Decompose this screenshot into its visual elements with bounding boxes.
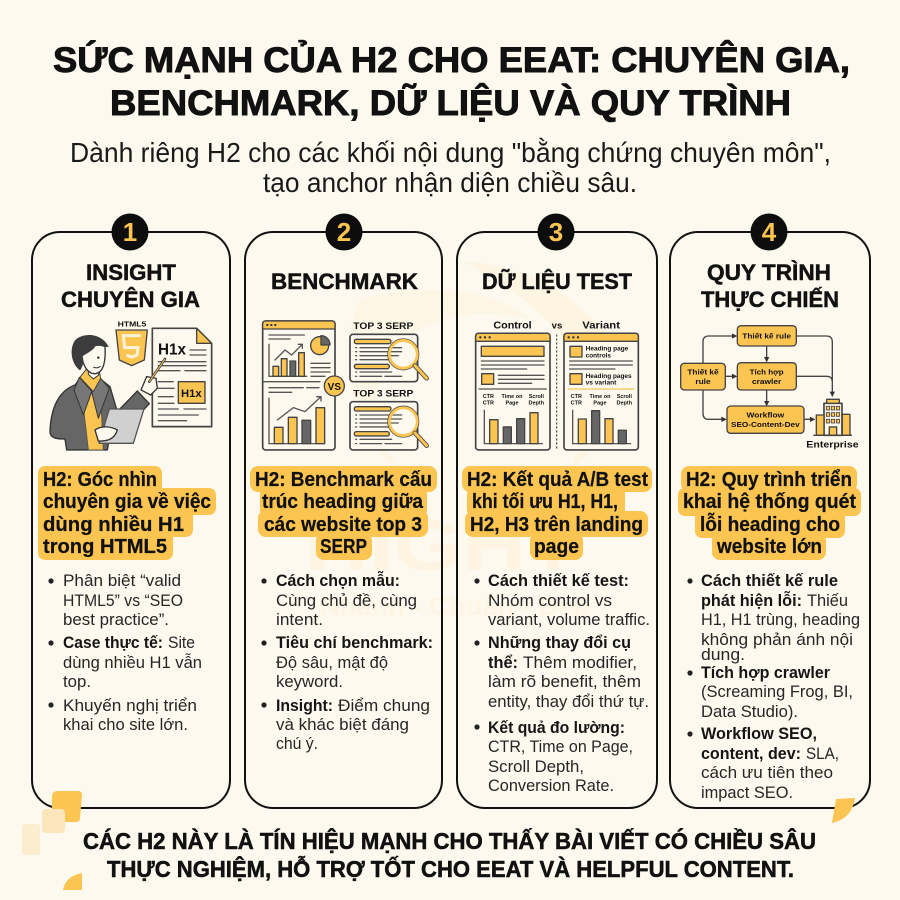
icon: control vs variant A/B test: Page (593, 401, 607, 407)
heading: dữ liệu test: DỮ LIỆU TEST (482, 269, 632, 294)
bullet list (687, 571, 860, 802)
H2 highlight text: H2: Quy trình triển (686, 469, 852, 491)
diagram: workflow to enterprise: Thiết kế rule (742, 332, 791, 341)
heading: quy trình thực chiến (701, 260, 839, 312)
H2 highlight text: dùng nhiều H1 (43, 514, 184, 536)
heading: benchmark: BENCHMARK (271, 269, 419, 294)
bullet list: khai cho site lớn. (63, 715, 188, 734)
bullet list: Kết quả đo lường: (488, 718, 625, 737)
diagram: workflow to enterprise: SEO-Content-Dev (731, 420, 800, 429)
title: SỨC MẠNH CỦA H2 CHO EEAT: CHUYÊN GIA, (53, 40, 850, 80)
H2 highlight text: page (534, 536, 579, 558)
icon: control vs variant A/B test: Heading page (586, 347, 629, 353)
H2 highlight text: trúc heading giữa (262, 491, 424, 513)
badge 4 (750, 214, 788, 250)
bullet list: Cách thiết kế rule (701, 571, 838, 590)
badge 4: 4 (762, 217, 777, 247)
bullet list: (Screaming Frog, BI, (701, 682, 853, 701)
subtitle (70, 137, 831, 198)
H2 highlight text (38, 466, 216, 560)
badge 3 (538, 214, 574, 250)
panel: insight chuyên gia (32, 214, 230, 808)
diagram: workflow to enterprise: Thiết kế (687, 367, 719, 376)
bullet list: làm rõ benefit, thêm (488, 672, 641, 691)
watermark logo: HIGHT (305, 506, 580, 586)
diagram: workflow to enterprise: rule (695, 377, 711, 386)
bullet list: entity, thay đổi thứ tự. (488, 692, 649, 711)
footer conclusion: THỰC NGHIỆM, HỖ TRỢ TỐT CHO EEAT VÀ HELPFUL CONTENT. (107, 854, 794, 882)
icon: expert pointing at document (50, 321, 212, 450)
H2 highlight text: chuyên gia về việc (43, 491, 211, 513)
H2 highlight text: H2: Benchmark cấu (255, 469, 432, 491)
bullet list: phát hiện lỗi: (701, 591, 802, 610)
diagram: workflow to enterprise: Workflow (746, 410, 784, 419)
icon: control vs variant A/B test: Heading pages (586, 374, 632, 380)
H2 highlight text: website lớn (716, 536, 822, 558)
bullet list: intent. (276, 610, 323, 629)
bullet list: H1, H1 trùng, heading (701, 610, 860, 629)
bullet list: Site (168, 633, 195, 652)
bullet list: HTML5” vs “SEO (63, 591, 183, 610)
badge 3: 3 (549, 217, 563, 247)
bullet list: chú ý. (276, 734, 318, 753)
H2 highlight text: trong HTML5 (43, 536, 167, 558)
bullet list: Insight: (276, 696, 333, 715)
bullet list: Khuyến nghị triển (63, 696, 197, 715)
H2 highlight text: các website top 3 (264, 514, 422, 536)
bullet list: Data Studio). (701, 702, 798, 721)
icon: control vs variant A/B test: Depth (529, 401, 545, 407)
bullet list: không phản ánh nội (701, 630, 853, 649)
H2 highlight text: khai hệ thống quét (683, 491, 856, 513)
icon: expert pointing at document: H1x (181, 388, 202, 400)
H2 highlight text (250, 466, 437, 560)
bullet list: SLA, (806, 744, 839, 763)
subtitle: Dành riêng H2 cho các khối nội dung "bằng chứng chuyên môn", (70, 137, 831, 168)
icon: benchmark dashboard vs top 3 serp (263, 321, 427, 450)
bullet list: Cùng chủ đề, cùng (276, 591, 417, 610)
icon: control vs variant A/B test: CTR (483, 394, 494, 400)
icon: control vs variant A/B test: Scroll (529, 394, 544, 400)
icon: control vs variant A/B test: controls (586, 353, 612, 359)
bullet list: Tích hợp crawler (701, 663, 830, 682)
heading: quy trình thực chiến: QUY TRÌNH (707, 260, 831, 285)
bullet list: Phân biệt “valid (63, 571, 181, 590)
H2 highlight text: H2: Kết quả A/B test (467, 469, 648, 491)
H2 highlight text: lỗi heading cho (700, 512, 840, 536)
H2 highlight text: khi tối ưu H1, H1, (472, 491, 618, 513)
bullet list: top. (63, 672, 91, 691)
icon: control vs variant A/B test: Variant (582, 320, 621, 331)
bullet list: Thiếu (807, 591, 848, 610)
bullet list (48, 571, 202, 734)
heading: insight chuyên gia: CHUYÊN GIA (61, 287, 200, 312)
panel: benchmark (245, 214, 442, 808)
badge 1 (112, 214, 148, 250)
bullet list (474, 571, 650, 795)
panel: quy trình thực chiến (670, 214, 870, 808)
diagram: workflow to enterprise: Tích hợp (750, 367, 784, 376)
bullet list: Scroll Depth, (488, 757, 584, 776)
icon: control vs variant A/B test: Time on (502, 394, 523, 400)
bullet list: Nhóm control vs (488, 591, 612, 610)
decorative accents (22, 791, 855, 890)
bullet list: Cách thiết kế test: (488, 571, 629, 590)
icon: control vs variant A/B test: Scroll (617, 394, 632, 400)
icon: control vs variant A/B test: CTR (571, 394, 582, 400)
icon: benchmark dashboard vs top 3 serp: TOP 3 SERP (353, 321, 413, 331)
watermark logo: Nhanh - Chuẩn - Đẹp (320, 593, 590, 621)
bullet list: Workflow SEO, (701, 724, 817, 743)
icon: control vs variant A/B test: vs (552, 320, 562, 330)
bullet list: Những thay đổi cụ (488, 633, 631, 652)
icon: control vs variant A/B test: vs variant (586, 380, 616, 386)
heading: insight chuyên gia (61, 260, 200, 312)
bullet list: dung. (701, 645, 745, 664)
icon: expert pointing at document: H1x (158, 341, 186, 358)
heading: quy trình thực chiến: THỰC CHIẾN (701, 287, 839, 312)
subtitle: tạo anchor nhận diện chiều sâu. (263, 167, 637, 198)
bullet list: thể: (488, 653, 518, 672)
bullet list (261, 571, 433, 753)
icon: control vs variant A/B test: Depth (617, 401, 633, 407)
badge 1: 1 (123, 217, 137, 247)
H2 highlight text: H2, H3 trên landing (470, 514, 643, 536)
H2 highlight text (462, 466, 652, 560)
bullet list: Case thực tế: (63, 633, 163, 652)
bullet list: impact SEO. (701, 783, 793, 802)
bullet list: Điểm chung (338, 696, 430, 715)
H2 highlight text: SERP (320, 536, 367, 558)
title (53, 40, 850, 123)
bullet list: keyword. (276, 672, 343, 691)
badge 2: 2 (337, 217, 351, 247)
badge 2 (326, 214, 362, 250)
bullet list: Thêm modifier, (523, 653, 637, 672)
bullet list: Conversion Rate. (488, 776, 614, 795)
bullet list: Độ sâu, mật độ (276, 653, 388, 672)
icon: benchmark dashboard vs top 3 serp: TOP 3 SERP (353, 389, 413, 399)
bullet list: content, dev: (701, 744, 801, 763)
bullet list: dùng nhiều H1 vẫn (63, 653, 202, 672)
watermark logo (305, 262, 619, 621)
footer conclusion: CÁC H2 NÀY LÀ TÍN HIỆU MẠNH CHO THẤY BÀI VIẾT CÓ CHIỀU SÂU (83, 827, 816, 854)
diagram: workflow to enterprise: Enterprise (806, 439, 859, 449)
diagram: workflow to enterprise: crawler (752, 377, 781, 386)
panel: dữ liệu test (457, 214, 657, 808)
icon: expert pointing at document: HTML5 (118, 321, 146, 328)
bullet list: best practice”. (63, 610, 169, 629)
icon: control vs variant A/B test: CTR (483, 401, 494, 407)
icon: control vs variant A/B test: Page (505, 401, 519, 407)
H2 highlight text: H2: Góc nhìn (43, 469, 157, 491)
bullet list: Cách chọn mẫu: (276, 571, 400, 590)
diagram: workflow to enterprise (681, 326, 859, 449)
heading: insight chuyên gia: INSIGHT (86, 260, 176, 285)
icon: control vs variant A/B test: CTR (571, 401, 582, 407)
icon: control vs variant A/B test: Control (493, 320, 532, 331)
icon: benchmark dashboard vs top 3 serp: VS (328, 382, 341, 393)
bullet list: variant, volume traffic. (488, 610, 650, 629)
bullet list: CTR, Time on Page, (488, 737, 633, 756)
bullet list: cách ưu tiên theo (701, 763, 833, 782)
icon: control vs variant A/B test (476, 320, 638, 450)
bullet list: Tiêu chí benchmark: (276, 633, 433, 652)
title: BENCHMARK, DỮ LIỆU VÀ QUY TRÌNH (110, 83, 791, 123)
footer conclusion (83, 827, 816, 882)
bullet list: và khác biệt đáng (276, 715, 409, 734)
H2 highlight text (678, 466, 861, 560)
icon: control vs variant A/B test: Time on (590, 394, 611, 400)
